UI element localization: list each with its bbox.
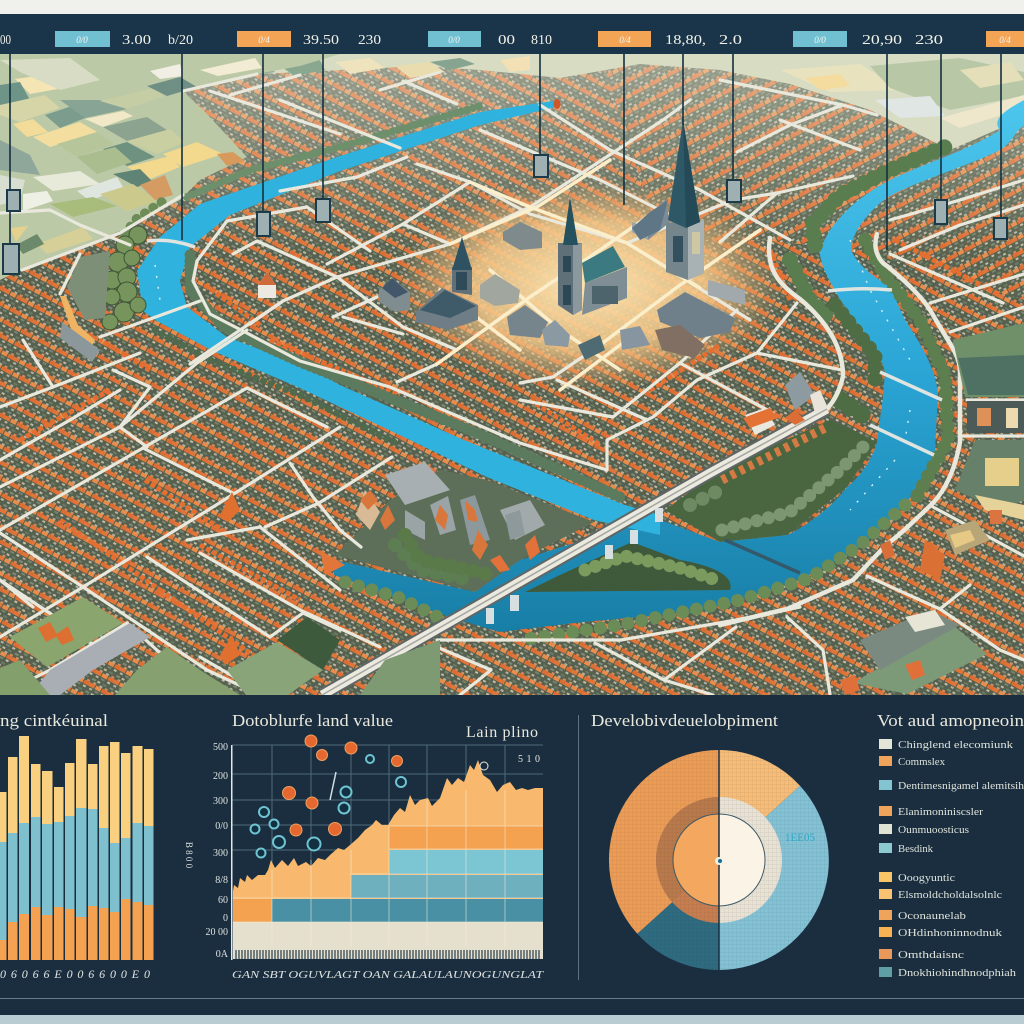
pin lantern — [3, 155, 1007, 274]
building: east arcade — [708, 280, 745, 305]
central glow district — [395, 180, 785, 390]
cream roads of the central district — [437, 160, 760, 390]
header labels: 20,90 — [862, 33, 902, 48]
panel: aerial city map — [0, 54, 1024, 695]
small value labels: 510 — [518, 754, 540, 765]
legend: Ounmuoosticus — [898, 824, 969, 836]
west park trees — [102, 226, 147, 330]
central church and civic buildings — [379, 120, 745, 360]
chip codes: 0/4 — [258, 35, 270, 45]
area chart axis labels: 60 — [218, 895, 228, 906]
header labels: 2.0 — [719, 33, 742, 48]
building: small pavilion — [578, 335, 605, 360]
top fields: pale farmland band — [266, 54, 1024, 149]
area chart axis labels: 0 — [223, 913, 228, 924]
header labels: 3.00 — [122, 33, 151, 48]
heading: pie chart: Develobivdeuelobpiment — [591, 711, 778, 730]
east woodland houses — [722, 428, 825, 480]
peninsula trees — [585, 556, 722, 582]
road network — [0, 72, 1024, 695]
area chart axis labels: 20 00 — [206, 927, 228, 938]
building: west chapel — [379, 278, 410, 312]
building: south hall — [507, 305, 548, 338]
legend: Dentimesnigamel alemitsih — [898, 780, 1024, 792]
stacked bar chart — [0, 736, 154, 960]
donut chart — [609, 750, 829, 970]
orange marker on north bank — [554, 99, 560, 109]
landmark: central church — [558, 197, 627, 315]
divider — [578, 715, 579, 980]
legend: Commslex — [898, 756, 945, 768]
panel: bottom dashboard — [0, 695, 1024, 1024]
area chart axis labels: 300 — [213, 796, 228, 807]
header labels: b/20 — [168, 33, 193, 48]
heading: legend: Vot aud amopneoin — [877, 711, 1024, 730]
area chart rotated axis label: B 8 0 0 — [184, 842, 194, 869]
chip codes: 0/0 — [76, 35, 88, 45]
highway viaduct — [322, 409, 827, 695]
chip codes: 0/0 — [448, 35, 460, 45]
tree belts along the river banks — [125, 106, 950, 640]
area chart axis labels: 0/0 — [215, 821, 228, 832]
land value area chart — [231, 745, 543, 960]
building: block with grid windows — [480, 274, 520, 306]
chip codes: 0/4 — [999, 35, 1011, 45]
building: north hall — [503, 222, 542, 250]
building: northeast hall — [632, 200, 670, 240]
southeast lots — [840, 520, 990, 695]
east riverside buildings — [743, 372, 828, 435]
header labels — [0, 33, 943, 48]
landmark: tall cathedral tower — [666, 120, 704, 280]
scatter markers — [250, 735, 488, 858]
landmark: west chapel tower — [452, 237, 472, 295]
building: west domed hall — [416, 288, 478, 330]
south-central district — [335, 470, 594, 592]
haze over the northern city — [136, 64, 1024, 232]
area chart axis labels: 8/8 — [215, 875, 228, 886]
header labels: 39.50 — [303, 33, 339, 48]
map pins and leader lines — [3, 54, 1007, 274]
building: southeast lower halls — [620, 326, 650, 350]
east fields and lots — [953, 323, 1024, 524]
header labels: 00 — [0, 33, 11, 48]
area chart axis labels: 0A — [216, 949, 229, 960]
area chart axis labels: 300 — [213, 848, 228, 859]
area chart axis labels: 200 — [213, 771, 228, 782]
legend: Oconaunelab — [898, 910, 967, 922]
chip codes — [76, 35, 1011, 45]
west mill buildings — [60, 296, 100, 362]
legend: Omthdaisnc — [898, 949, 964, 961]
legend: Chinglend elecomiunk — [898, 739, 1014, 751]
heading: land value chart: Dotoblurfe land value — [232, 711, 393, 730]
legend: Elsmoldcholdalsolnlc — [898, 889, 1002, 901]
header labels: 00 — [498, 33, 515, 48]
south-central buildings — [220, 462, 545, 665]
legend: Ooogyuntic — [898, 872, 955, 884]
landmark: small house west of ring — [258, 272, 276, 298]
east woodland — [665, 420, 877, 542]
header labels: 230 — [915, 33, 943, 48]
building: southeast arcade — [655, 325, 705, 358]
heading: bar chart: ng cintkéuinal — [0, 711, 108, 730]
pie callout: 1EE05 — [785, 830, 815, 844]
southwest fields — [0, 597, 440, 695]
area chart axis labels — [206, 742, 229, 960]
legend — [879, 739, 1024, 979]
legend: Besdink — [898, 843, 933, 855]
river: east bend, lake and southern branch — [334, 100, 1024, 632]
header labels: 18,80, — [665, 33, 706, 48]
farmland: northwest fields — [0, 54, 340, 280]
river: west branch — [137, 100, 660, 535]
header labels: 230 — [358, 33, 381, 48]
field patches along top band — [230, 56, 530, 78]
legend: OHdinhoninnodnuk — [898, 927, 1003, 939]
west lot — [67, 251, 110, 320]
area chart x-axis labels: GAN SBT OGUVLAGT OAN GALAULAUNOGUNGLAT — [232, 969, 544, 981]
header bar — [0, 14, 1024, 54]
legend: Dnokhiohindhnodphiah — [898, 967, 1017, 979]
city texture: eastern quarter — [600, 54, 1024, 300]
area chart axis labels: 500 — [213, 742, 228, 753]
bar chart x-axis labels: 0 6 0 6 6 E 0 0 6 6 0 0 E 0 — [0, 967, 150, 981]
header chips — [55, 31, 1024, 47]
orange roof rows — [20, 240, 1000, 660]
river highlights — [155, 240, 910, 510]
building: southeast halls — [657, 292, 735, 338]
chip codes: 0/0 — [814, 35, 826, 45]
building: south chapel — [542, 320, 570, 347]
chip codes: 0/4 — [619, 35, 631, 45]
farmland: northeast fields — [780, 58, 1024, 128]
peninsula: wooded island — [525, 542, 731, 592]
river bridges — [147, 240, 942, 573]
sub-heading: land plan: Lain plino — [466, 724, 538, 741]
header labels: 810 — [531, 33, 552, 48]
south-central trees — [405, 535, 490, 575]
legend: Elanimoniniscsler — [898, 806, 983, 818]
